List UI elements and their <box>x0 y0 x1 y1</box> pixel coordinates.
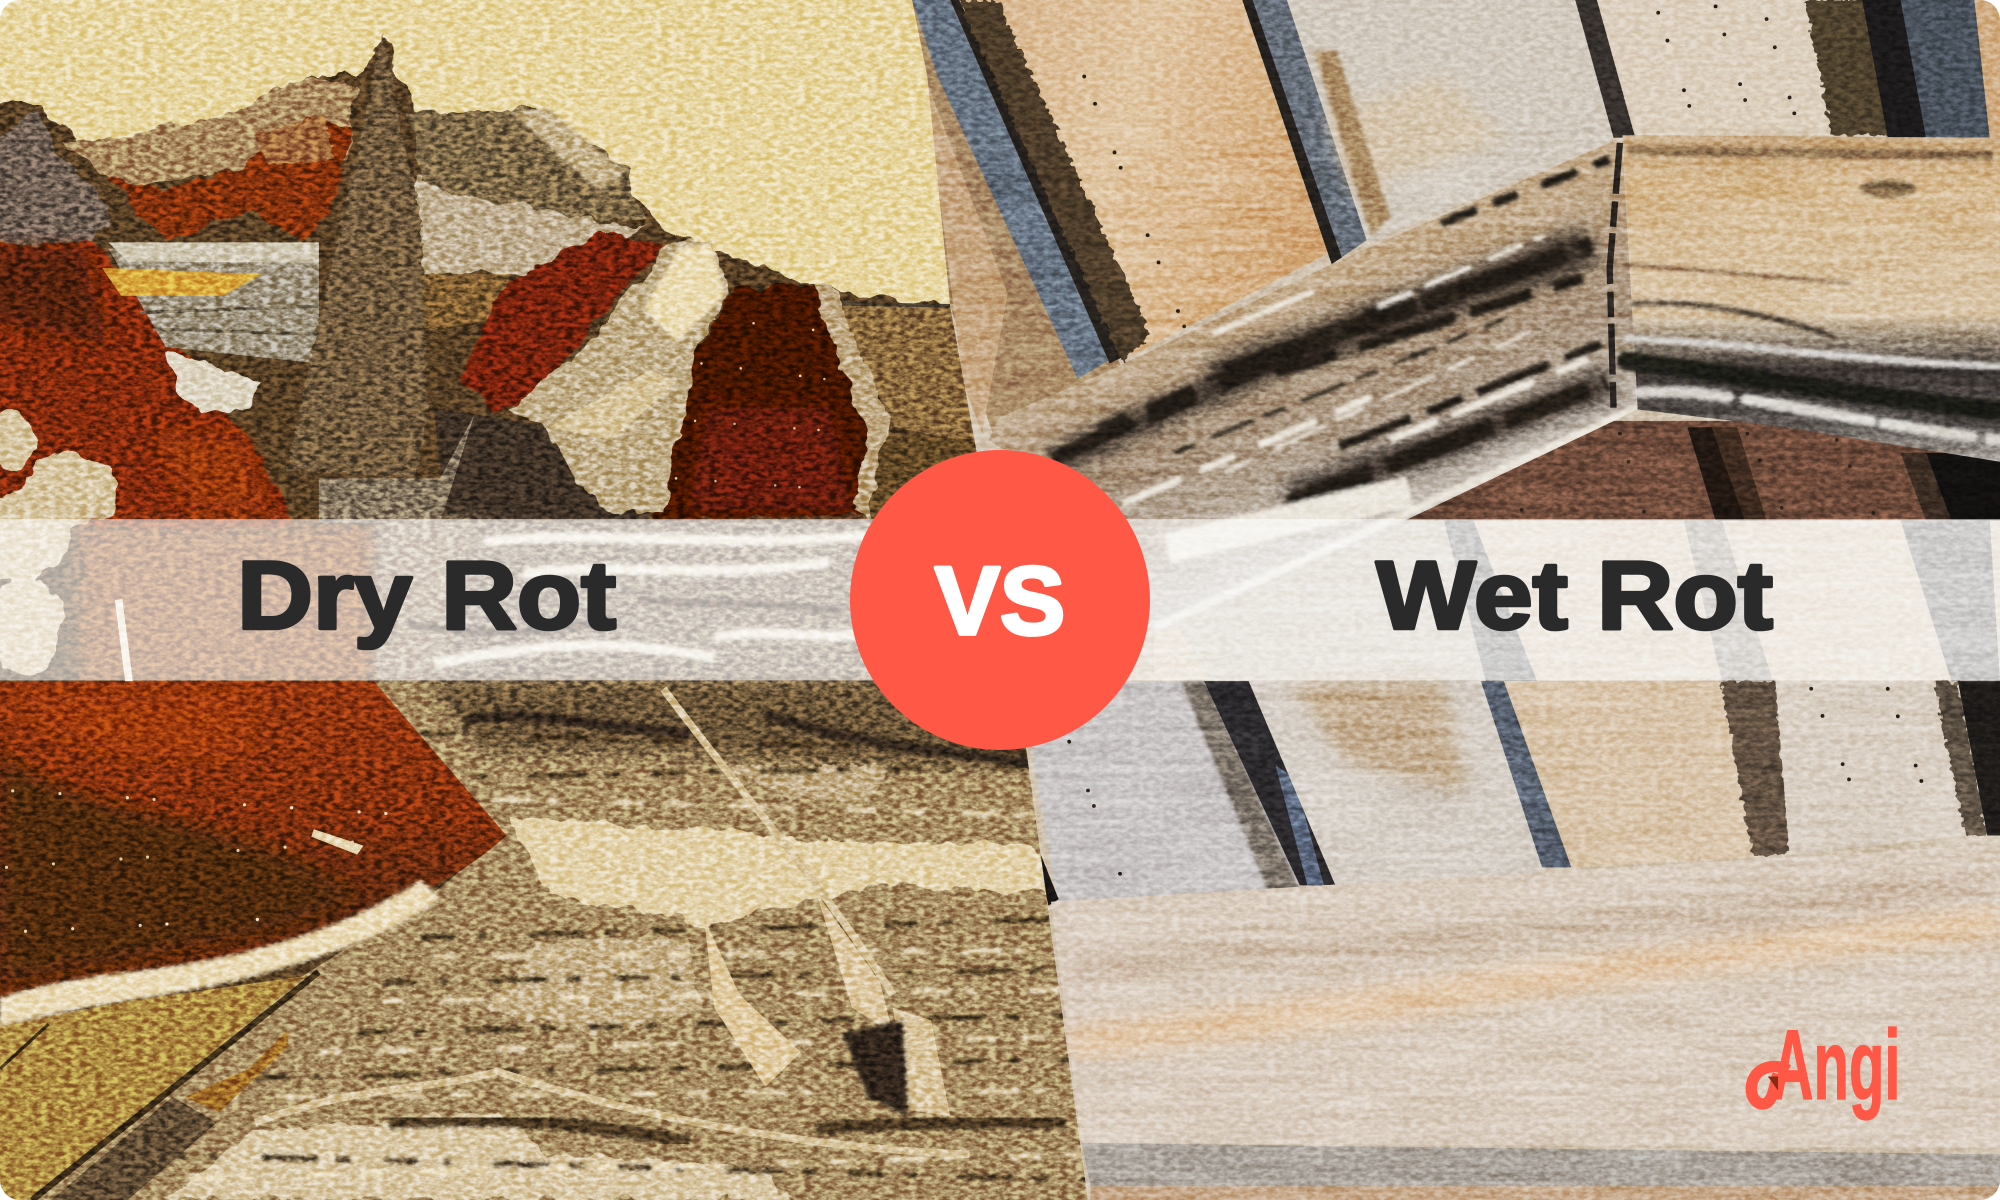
debris streaks <box>128 733 1097 1180</box>
VS badge: VS <box>935 546 1065 655</box>
grey stripe two <box>1242 0 1367 264</box>
dark gap <box>434 408 651 519</box>
under-beam brown planks <box>1301 421 2000 520</box>
fine plank grain <box>893 0 2000 1200</box>
tan plank one <box>959 0 1337 357</box>
dark stripe three <box>1575 0 1635 138</box>
plaster wall <box>0 0 995 312</box>
blue stripe one <box>912 0 1110 379</box>
joint <box>1610 143 1620 408</box>
lower beam <box>1051 844 2000 1148</box>
translucent label band <box>0 519 2000 680</box>
dark metal stripe <box>1875 0 1990 138</box>
mould strip <box>1805 0 1901 135</box>
left rust <box>0 242 296 529</box>
splinter <box>287 32 427 478</box>
dark right rust <box>651 287 883 520</box>
VS badge <box>850 450 1150 750</box>
gold plank <box>0 976 306 1200</box>
cream bumps <box>0 412 116 676</box>
light crust middle <box>415 179 644 274</box>
debris floor <box>0 681 1110 1200</box>
crust right <box>811 286 889 517</box>
wood grain, horizontal <box>893 128 2000 1200</box>
logo: Angi: Angi <box>1772 1010 1901 1121</box>
rust visible behind band <box>79 526 375 685</box>
panel: dry rot photo <box>0 0 1110 1200</box>
heading: Dry Rot: Dry Rot <box>237 540 616 649</box>
diagonal beam <box>989 142 1638 634</box>
plank specks <box>1059 6 1939 880</box>
upper rust <box>108 115 351 242</box>
heading: Wet Rot: Wet Rot <box>1376 540 1773 649</box>
photo grain <box>0 0 1097 1200</box>
wood behind band <box>378 520 893 681</box>
lower beam fascia <box>1082 1143 2000 1186</box>
lower rust <box>0 681 506 997</box>
panel: wet rot photo <box>893 0 2000 1200</box>
planks seen through band <box>1154 520 2000 681</box>
crust around upper rust <box>64 77 355 191</box>
beam mould streaks <box>1052 159 1638 628</box>
paper curl <box>508 240 727 513</box>
white plank two <box>1287 0 1617 242</box>
cream border <box>0 880 440 1027</box>
rust specks <box>6 791 434 931</box>
baseboard <box>842 306 974 440</box>
far-left plank <box>912 0 1122 440</box>
fibres <box>255 689 969 1154</box>
pale plank three <box>1597 0 1833 135</box>
white chip <box>168 351 261 415</box>
splinters <box>704 918 801 1087</box>
grey patch <box>0 108 112 249</box>
mid plank <box>108 249 319 364</box>
logo: Angi <box>1751 1010 1901 1121</box>
right beam <box>1622 135 2000 462</box>
lower planks <box>1020 681 1314 908</box>
mid rust <box>457 230 666 411</box>
mould strip one <box>959 0 1151 364</box>
